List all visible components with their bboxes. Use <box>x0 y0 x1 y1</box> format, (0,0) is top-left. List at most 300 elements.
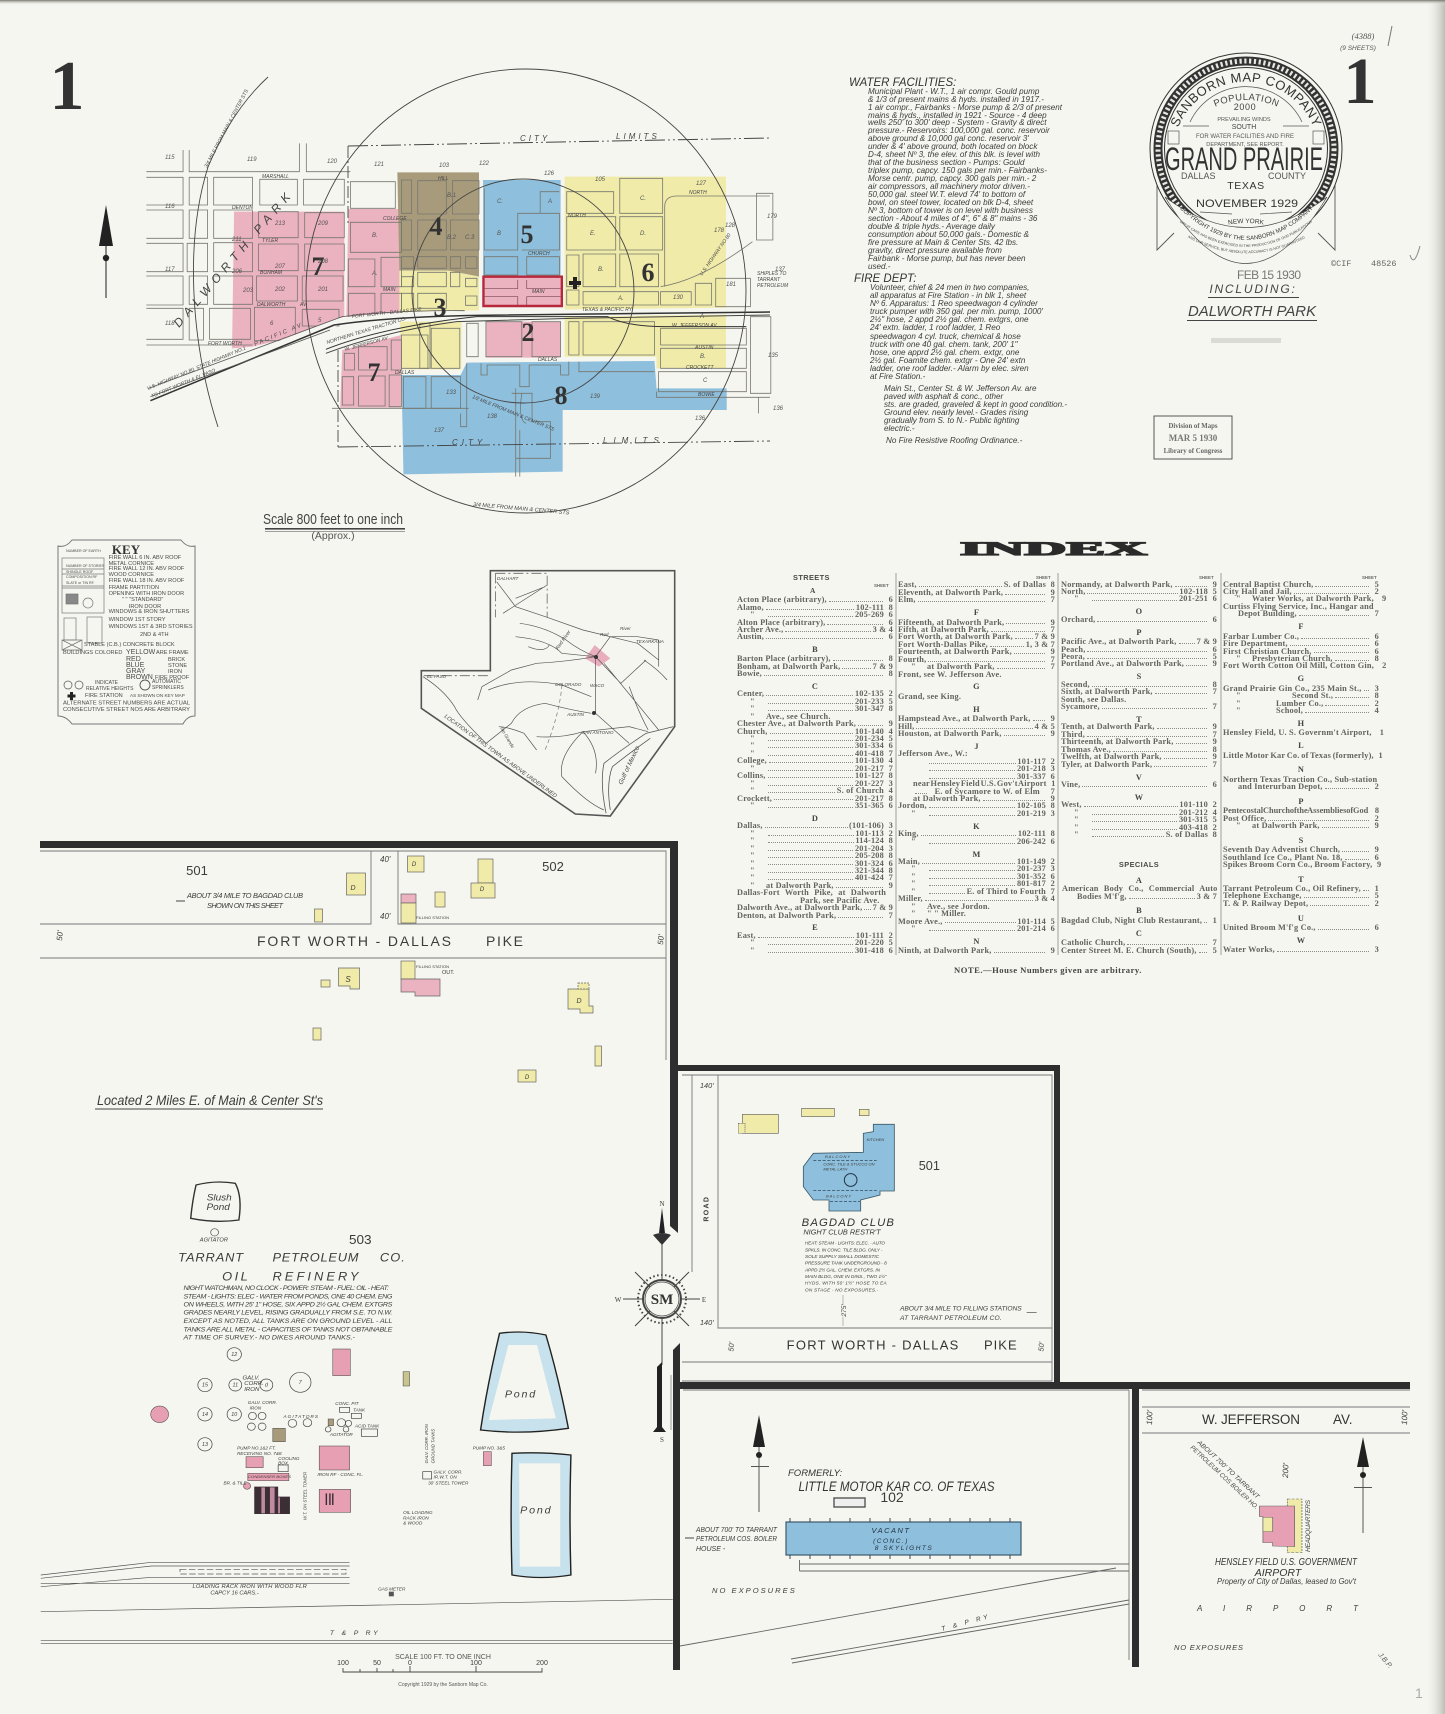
refinery small labels: CONC. PIT <box>335 1401 359 1406</box>
index column 3: 5 <box>1213 815 1217 824</box>
water facilities and fire department notes: 24' extn. ladder, 1 roof ladder, 1 Reo <box>869 323 1001 332</box>
index column 3: C <box>1136 929 1142 938</box>
title cartouche seal: DALLAS <box>1181 171 1216 181</box>
index column 4: Water Works, at Dalworth Park, <box>1252 594 1374 603</box>
index column 3: " <box>1074 808 1079 817</box>
panel: Tarrant Petroleum Co oil refinery: AGITATOR <box>199 1238 228 1244</box>
title cartouche seal: FOR WATER FACILITIES AND FIRE <box>1196 134 1294 140</box>
index column 3: North, <box>1061 587 1085 596</box>
index column 1: " <box>750 712 755 721</box>
index column 2: N <box>973 937 980 946</box>
index column 2: " <box>911 809 916 818</box>
panel: sheet 501-502 Fort Worth-Dallas Pike: FILLING STATION <box>416 915 449 920</box>
index column 1: 8 <box>889 704 893 713</box>
index column 4: and Interurban Depot, <box>1238 782 1323 791</box>
loading rack <box>41 1562 673 1643</box>
panel: Tarrant Petroleum Co oil refinery: 15 <box>202 1383 208 1389</box>
index column 2: Elm, <box>898 595 916 604</box>
title cartouche seal: NOVEMBER 1929 <box>1196 198 1298 210</box>
Texas locator map: River <box>620 626 631 631</box>
index column 3: 9 <box>1213 659 1217 668</box>
key legend panel: CONSECUTIVE STREET NOS ARE ARBITRARY <box>63 707 190 713</box>
index column 3: V <box>1136 773 1142 782</box>
water facilities and fire department notes: under & 4' above ground, both located on block <box>868 142 1038 151</box>
index column 1: " <box>750 697 755 706</box>
north arrow: airport sheet <box>1354 1437 1372 1533</box>
panel: Hensley Field airport: HENSLEY FIELD U.S. GOVERNMENT <box>1215 1556 1358 1568</box>
Dalworth Park label: DALWORTH PARK <box>171 189 294 330</box>
index column 2: E. of Sycamore to W. of Elm <box>935 787 1040 796</box>
panel: Tarrant Petroleum Co oil refinery: 10 <box>231 1412 237 1418</box>
water facilities and fire department notes: 1 air compr., Fairbanks - Morse pump & 2/3 of present <box>868 103 1063 112</box>
key legend panel: FIRE WALL 12 IN. ABV ROOF <box>109 566 185 572</box>
index column 2: 9 <box>1051 588 1055 597</box>
panel: sheet 501-502 Fort Worth-Dallas Pike: 502 <box>542 859 564 874</box>
key legend panel: KEY <box>112 542 141 557</box>
compass rose: SM <box>651 1292 673 1308</box>
index column 3: 5 <box>1213 946 1217 955</box>
index column 3: Portland Ave., at Dalworth Park, <box>1061 659 1184 668</box>
water facilities and fire department notes: at Fire Station.- <box>870 372 926 381</box>
water facilities and fire department notes: & 1/3 of present mains & hyds. installed in 1917.- <box>868 95 1044 104</box>
key map street and block labels: 139 <box>590 394 601 400</box>
panel: Tarrant Petroleum Co oil refinery: 7 <box>299 1380 303 1386</box>
index column 4 <box>1223 580 1386 954</box>
index column 4: " <box>1236 654 1241 663</box>
key map street and block labels: 206 <box>231 269 243 275</box>
index column 3: 9 <box>1213 580 1217 589</box>
index column 3: 6 <box>1213 615 1217 624</box>
index column 3: Center Street M. E. Church (South), <box>1061 946 1197 955</box>
key legend panel: STABLE (C.B.) CONCRETE BLOCK <box>84 642 175 648</box>
key map street and block labels: LIMITS <box>603 436 665 445</box>
key map street and block labels: 133 <box>446 390 457 396</box>
index column 2: Moore Ave., <box>898 917 943 926</box>
index column 1: Austin, <box>737 632 764 641</box>
key map street and block labels: 121 <box>374 162 384 168</box>
index column 4: Pentecostal Church of the Assemblies of God <box>1223 806 1368 815</box>
key map street and block labels: E. <box>590 231 596 237</box>
scale bar: 100 ft to one inch: Copyright 1929 by the Sanborn Map Co. <box>398 1682 488 1688</box>
index column 1: Church, <box>737 727 768 736</box>
index column 4: 1 <box>1375 884 1379 893</box>
index column 1: " <box>750 873 755 882</box>
water facilities and fire department notes: pressure.- Reservoirs: 100,000 gal. conc. reservoir <box>867 126 1050 135</box>
index column 4: First Christian Church, <box>1223 647 1312 656</box>
water facilities and fire department notes: Nº 6. Apparatus: 1 Reo speedwagon 4 cylinder <box>870 299 1038 308</box>
scale bar: 100 ft to one inch: SCALE 100 FT. TO ONE INCH <box>395 1654 491 1661</box>
index column 3: 8 <box>1213 680 1217 689</box>
index column 3: 101-110 <box>1179 800 1208 809</box>
index column 2: 101-117 <box>1017 757 1046 766</box>
scale bar: 100 ft to one inch: 50 <box>373 1660 381 1667</box>
index column 2: 1, 3 & 7 <box>1026 640 1055 649</box>
index column 4: Grand Prairie Gin Co., 235 Main St., <box>1223 684 1362 693</box>
index column 2: F <box>974 608 979 617</box>
water facilities and fire department notes: Volunteer, chief & 24 men in two companies, <box>870 283 1029 292</box>
Texas locator map: Gulf of Mexico <box>617 745 642 786</box>
index column 2: Grand, see King. <box>898 692 961 701</box>
key map street and block labels: 103 <box>439 163 450 169</box>
index column 2: 6 <box>1051 837 1055 846</box>
panel: Hensley Field airport: 200' <box>1281 1462 1291 1479</box>
Texas locator map: SAN ANTONIO <box>582 730 614 735</box>
index column 4: Spikes Broom Corn Co., Broom Factory, <box>1223 860 1372 869</box>
index column 1: C <box>812 682 818 691</box>
title cartouche seal: POPULATION <box>1214 94 1279 106</box>
key legend panel: METAL CORNICE <box>109 561 154 567</box>
refinery small labels: CORR. <box>244 1381 264 1387</box>
index column 2: East, <box>898 580 917 589</box>
index column 3: 8 <box>1213 830 1217 839</box>
index column 3: Thomas Ave., <box>1061 745 1111 754</box>
index column 1: 301-347 <box>855 704 884 713</box>
index column 3: American Body Co., Commercial Auto <box>1062 884 1218 893</box>
water facilities and fire department notes: Fairbank - Morse pump, but has never been <box>868 254 1026 263</box>
key map scale <box>263 511 405 542</box>
Texas locator map <box>421 571 675 816</box>
key legend panel: BUILDINGS COLORED <box>63 650 122 656</box>
panel: Bagdad Club sheet 501: 501 <box>919 1159 940 1173</box>
panel: Tarrant Petroleum Co oil refinery: 12 <box>231 1352 237 1358</box>
key map street and block labels: PACIFIC AV <box>253 322 304 348</box>
text: 2 <box>1382 661 1386 670</box>
key legend panel: OPENING WITH IRON DOOR <box>109 591 184 597</box>
panel: sheet 501-502 Fort Worth-Dallas Pike: D <box>350 885 356 892</box>
index column 4: Northern Texas Traction Co., Sub-station <box>1223 775 1377 784</box>
index column 1: 101-140 <box>855 727 884 736</box>
key map street and block labels: 120 <box>327 159 338 165</box>
key map street and block labels: A. <box>371 271 378 277</box>
panel: Bagdad Club sheet 501: CONC. TILE & STUCCO ON <box>823 1162 875 1167</box>
water facilities and fire department notes: FIRE DEPT: <box>854 273 916 285</box>
index column 2: 4 & 5 <box>1035 722 1055 731</box>
index column 1: Collins, <box>737 771 766 780</box>
key map big sheet numerals: 7 <box>312 252 324 281</box>
refinery small labels: GALV. CORR. <box>433 1470 463 1475</box>
index column 3: A <box>1136 876 1142 885</box>
index column 4: Fire Department, <box>1223 639 1288 648</box>
index column 2: " <box>911 887 916 896</box>
key map street and block labels: B. <box>372 233 378 239</box>
panel: sheet 501-502 Fort Worth-Dallas Pike: FILLING STATION <box>416 964 449 969</box>
index column 3: 102-118 <box>1179 587 1208 596</box>
index column 2: 301-352 <box>1017 872 1046 881</box>
refinery small labels: GALV. <box>242 1375 260 1381</box>
panel: Little Motor Kar Co sheet 102 <box>680 1468 1129 1663</box>
Texas locator map: COLORADO <box>555 682 582 687</box>
key legend panel: STONE <box>168 663 187 669</box>
refinery small labels: RECEIVING NO. 7&8 <box>237 1451 282 1456</box>
Library of Congress stamp <box>1154 416 1232 459</box>
panel: sheet 501-502 Fort Worth-Dallas Pike: 40' <box>380 855 391 864</box>
key legend panel: COMPOSITION RF <box>66 575 98 579</box>
title cartouche seal: AND OUR SERVICE, BUT ABSOLUTE ACCURACY IS NOT GUARANTEED <box>1188 236 1304 254</box>
key map street and block labels: 118 <box>165 321 175 327</box>
index column 2: Ave., see Jordon. <box>927 902 990 911</box>
panel: Bagdad Club sheet 501: SOLE SUPPLY SMALL DOMESTIC <box>805 1254 880 1259</box>
key map street and block labels: U.S. HIGHWAY NO.80 <box>699 232 733 277</box>
refinery buildings <box>151 1349 491 1512</box>
title cartouche seal: GRAND PRAIRIE <box>1165 141 1323 177</box>
index column 1: " <box>750 764 755 773</box>
index column 4: 6 <box>1375 647 1379 656</box>
key map street and block labels: DALWORTH <box>257 302 286 308</box>
index column 1: " <box>750 741 755 750</box>
index: sheet label col 2: SHEET <box>1036 574 1051 580</box>
panel: sheet 501-502 Fort Worth-Dallas Pike: D <box>412 862 417 868</box>
Texas locator map: LOCATION OF THIS TOWN AS ABOVE UNDERLINED <box>443 714 558 799</box>
index column 3: " <box>1074 830 1079 839</box>
key legend panel: BROWN <box>126 674 153 681</box>
index column 4: Water Works, <box>1223 945 1275 954</box>
index column 1: 3 <box>889 821 893 830</box>
sheet count note: (4388) <box>1352 31 1374 41</box>
key map street and block labels: 208 <box>317 259 329 265</box>
text: 1 <box>1378 751 1383 760</box>
index column 4: Farbar Lumber Co., <box>1223 632 1299 641</box>
key map street and block labels: COLLEGE <box>383 216 407 222</box>
key map street and block labels: 136 <box>773 406 784 412</box>
index column 1: Dalworth Ave., at Dalworth Park, <box>737 903 862 912</box>
text: 1 <box>1380 728 1384 737</box>
key map street and block labels: FORT WORTH <box>208 341 242 347</box>
refinery title: PETROLEUM <box>272 1251 359 1264</box>
index column 2: 101-149 <box>1017 857 1046 866</box>
index column 2: 1 <box>1051 779 1056 788</box>
refinery small labels: W.T. ON STEEL TOWER <box>303 1471 308 1520</box>
panel: Hensley Field airport: AV. <box>1333 1412 1353 1427</box>
index column 1: " <box>750 881 755 890</box>
panel: Little Motor Kar Co sheet 102: PETROLEUM COS. BOILER <box>696 1536 777 1543</box>
index column 1: 7 <box>889 749 893 758</box>
key map street and block labels: DENTON <box>232 205 253 211</box>
index column 3: 201-251 <box>1179 594 1208 603</box>
index column 1: Acton Place (arbitrary), <box>737 595 827 604</box>
index column 1: 7 <box>889 911 893 920</box>
key map street and block labels: MARSHALL <box>262 174 289 180</box>
key map street and block labels: NORTH <box>568 213 586 219</box>
index column 2: " <box>911 902 916 911</box>
index column 1: " <box>750 779 755 788</box>
index column 2: Jordon, <box>898 801 927 810</box>
index column 1: 2 <box>889 689 893 698</box>
refinery notes: AT TIME OF SURVEY.- NO DIKES AROUND TANKS.- <box>183 1335 356 1341</box>
index column 1: 201-233 <box>855 697 884 706</box>
index column 1: 8 <box>889 851 893 860</box>
key map street and block labels: NORTHERN TEXAS TRACTION CO. <box>326 316 407 346</box>
index column 4: 8 <box>1375 806 1379 815</box>
railroad and pike <box>148 311 770 401</box>
index column 4: N <box>1298 765 1304 774</box>
index column 2: 3 & 4 <box>1035 894 1055 903</box>
key map street and block labels: LIMITS <box>616 132 660 141</box>
key map street and block labels: 136 <box>695 416 706 422</box>
Texas locator map: Red <box>600 632 609 637</box>
index column 3: 4 <box>1213 808 1217 817</box>
key map scale: Scale 800 feet to one inch <box>263 511 403 528</box>
panel: Hensley Field airport: 100' <box>1400 1409 1410 1425</box>
key map street and block labels: 135 <box>768 353 779 359</box>
refinery notes: GRADES NEARLY LEVEL, RISING GRADUALLY FROM S.E. TO N.W. <box>184 1310 393 1317</box>
index column 1: Archer Ave., <box>737 625 783 634</box>
water facilities and fire department notes: double & triple hyds.- Average daily <box>868 222 996 231</box>
key map street and block labels: 122 <box>479 161 490 167</box>
index column 3: B <box>1136 906 1142 915</box>
index column 2: 7 <box>1051 625 1055 634</box>
index column 1: 6 <box>889 946 893 955</box>
index column 1: 301-334 <box>855 741 884 750</box>
key map street and block labels: B. <box>700 354 706 360</box>
panel: Hensley Field airport: W. JEFFERSON <box>1202 1412 1300 1427</box>
panel: Little Motor Kar Co sheet 102: LITTLE MOTOR KAR CO. OF TEXAS <box>798 1478 995 1494</box>
key map street and block labels: BOWIE <box>698 392 715 398</box>
index column 2: Jefferson Ave., W.: <box>898 749 968 758</box>
city limits lines and radius circles <box>193 69 770 513</box>
index column 1: 4 <box>889 786 893 795</box>
panel: Bagdad Club sheet 501: ROAD <box>703 1196 710 1222</box>
index column 1: 102-135 <box>855 689 884 698</box>
index column 1: " <box>750 749 755 758</box>
lower banner panel <box>1165 197 1327 264</box>
index column 3: 1 <box>1213 916 1217 925</box>
key legend panel: FIRE WALL 6 IN. ABV ROOF <box>109 555 182 561</box>
index column 4: 2 <box>1375 782 1379 791</box>
Texas locator map: Red River <box>555 629 573 651</box>
panel: sheet 501-502 Fort Worth-Dallas Pike: 40' <box>380 912 391 921</box>
key map street and block labels: 115 <box>165 155 175 161</box>
index column 1: Ave., see Church. <box>766 712 831 721</box>
refinery notes <box>183 1285 393 1341</box>
index column 1: " <box>750 734 755 743</box>
index column 3: " <box>1074 823 1079 832</box>
panel: Little Motor Kar Co sheet 102: (CONC.) <box>873 1538 909 1545</box>
index column 2: " <box>911 662 916 671</box>
index column 1: 6 <box>889 610 893 619</box>
panel: Tarrant Petroleum Co oil refinery <box>41 1182 673 1643</box>
panel: sheet 501-502 Fort Worth-Dallas Pike: D <box>576 998 582 1005</box>
index column 3: Bagdad Club, Night Club Restaurant, <box>1061 916 1202 925</box>
index column 1: College, <box>737 756 767 765</box>
water facilities and fire department notes: triplex pump, capcy. 150 gals per min.- Fairbanks- <box>868 166 1047 175</box>
index column 2: 201-214 <box>1017 924 1046 933</box>
title cartouche seal: COUNTY <box>1268 171 1306 181</box>
index column 4: at Dalworth Park, <box>1252 821 1320 830</box>
index column 2: Main, <box>898 857 920 866</box>
scale bar: 100 ft to one inch: 100 <box>470 1660 482 1667</box>
index column 3: 7 <box>1213 702 1217 711</box>
index column 2: Hill, <box>898 722 914 731</box>
refinery title: CO. <box>380 1251 405 1264</box>
key map street and block labels: TEXAS & PACIFIC RY <box>582 307 633 313</box>
index column 1: 8 <box>889 836 893 845</box>
compass rose: S <box>660 1436 664 1444</box>
index column 4: G <box>1298 674 1304 683</box>
index column 2: 7 <box>1051 655 1055 664</box>
key map of the town <box>146 69 789 516</box>
index column 4: L <box>1298 741 1304 750</box>
index column 4: W <box>1297 936 1305 945</box>
panel: Tarrant Petroleum Co oil refinery: Slush <box>207 1193 232 1204</box>
index column 3: S. of Dallas <box>1166 830 1208 839</box>
index column 2: 8 <box>1051 801 1055 810</box>
key map street and block labels: W. JEFFERSON AV <box>672 323 717 329</box>
index column 2: Houston, at Dalworth Park, <box>898 729 1002 738</box>
index column 1: at Dalworth Park, <box>766 881 834 890</box>
panel: Hensley Field airport <box>1145 1409 1423 1701</box>
refinery small labels: GALV. CORR. <box>248 1400 277 1405</box>
index column 2: Hampstead Ave., at Dalworth Park, <box>898 714 1031 723</box>
index column 1: 3 <box>889 779 893 788</box>
index column 1: 8 <box>889 866 893 875</box>
oil tanks <box>198 1348 432 1479</box>
Main Street blocks outlined in red <box>483 277 562 306</box>
refinery small labels: IR.W.T. ON <box>433 1475 458 1480</box>
buildings on the pike <box>313 856 602 1082</box>
key map street and block labels: A. <box>617 296 624 302</box>
Texas locator map: DALHART <box>497 576 520 581</box>
index column 4: 3 <box>1375 945 1379 954</box>
Library of Congress stamp: MAR 5 1930 <box>1169 433 1218 443</box>
water facilities and fire department notes: above ground & 10,000 gal conc. reservoir 3' <box>868 134 1029 143</box>
index column 4: 6 <box>1375 853 1379 862</box>
index column 4: 6 <box>1375 632 1379 641</box>
sheet count note: (9 SHEETS) <box>1340 45 1376 52</box>
key map street and block labels: C. <box>497 199 503 205</box>
panel: Bagdad Club sheet 501: ON STAGE - NO EXPOSURES.- <box>805 1287 879 1292</box>
panel: Tarrant Petroleum Co oil refinery: CAPCY 16 CARS.- <box>210 1591 259 1597</box>
index column 4: 2 <box>1375 699 1379 708</box>
index column 2: H <box>973 705 980 714</box>
index column 2 <box>898 580 1056 955</box>
index column 2: 206-242 <box>1017 837 1046 846</box>
key map street and block labels: 119 <box>247 157 257 163</box>
index column 1: Dallas, <box>737 821 763 830</box>
key legend panel: RELATIVE HEIGHTS <box>86 686 134 692</box>
refinery small labels: PUMP NO. 3&5 <box>473 1445 505 1450</box>
index column 4: Hensley Field, U. S. Governm't Airport, <box>1223 728 1372 737</box>
index column 2: 301-337 <box>1017 772 1046 781</box>
key map street and block labels: 3/4 MILE FROM MAIN & CENTER STS <box>203 88 250 169</box>
north arrow: key map <box>99 205 113 298</box>
including Dalworth Park: DALWORTH PARK <box>1188 303 1317 320</box>
key legend panel: AUTOMATIC <box>152 679 181 685</box>
key legend panel: 2ND & 4TH <box>140 632 169 638</box>
index column 1: Bonham, at Dalworth Park, <box>737 662 840 671</box>
title cartouche seal <box>1150 52 1342 264</box>
index column 2: 102-111 <box>1018 829 1046 838</box>
panel: Hensley Field airport: HEADQUARTERS <box>1305 1499 1312 1552</box>
index column 4: T <box>1298 875 1304 884</box>
refinery small labels: COOLING <box>278 1456 300 1461</box>
index column 2: S. of Dallas <box>1004 580 1046 589</box>
key map street and block labels: 178 <box>714 228 725 234</box>
index column 2: 7 <box>1051 662 1055 671</box>
water facilities and fire department notes: Morse centr. pump, capcy. 300 gals per min.- 2 <box>868 174 1037 183</box>
index column 2: 7 <box>1051 787 1055 796</box>
index column 2: 201-237 <box>1017 864 1046 873</box>
index column 2: 201-219 <box>1017 809 1046 818</box>
index column 2: 7 & 9 <box>1035 632 1055 641</box>
index column 1: D <box>812 814 818 823</box>
panel: Bagdad Club sheet 501: 50' <box>1036 1341 1046 1352</box>
index: sheet label col 4: SHEET <box>1362 574 1377 580</box>
club building <box>803 1124 894 1211</box>
index column 1: Park, see Pacific Ave. <box>800 896 880 905</box>
key map big sheet numerals: 3 <box>434 293 446 322</box>
index column 2: 3 <box>1051 764 1055 773</box>
index column 3: Peora, <box>1061 652 1085 661</box>
